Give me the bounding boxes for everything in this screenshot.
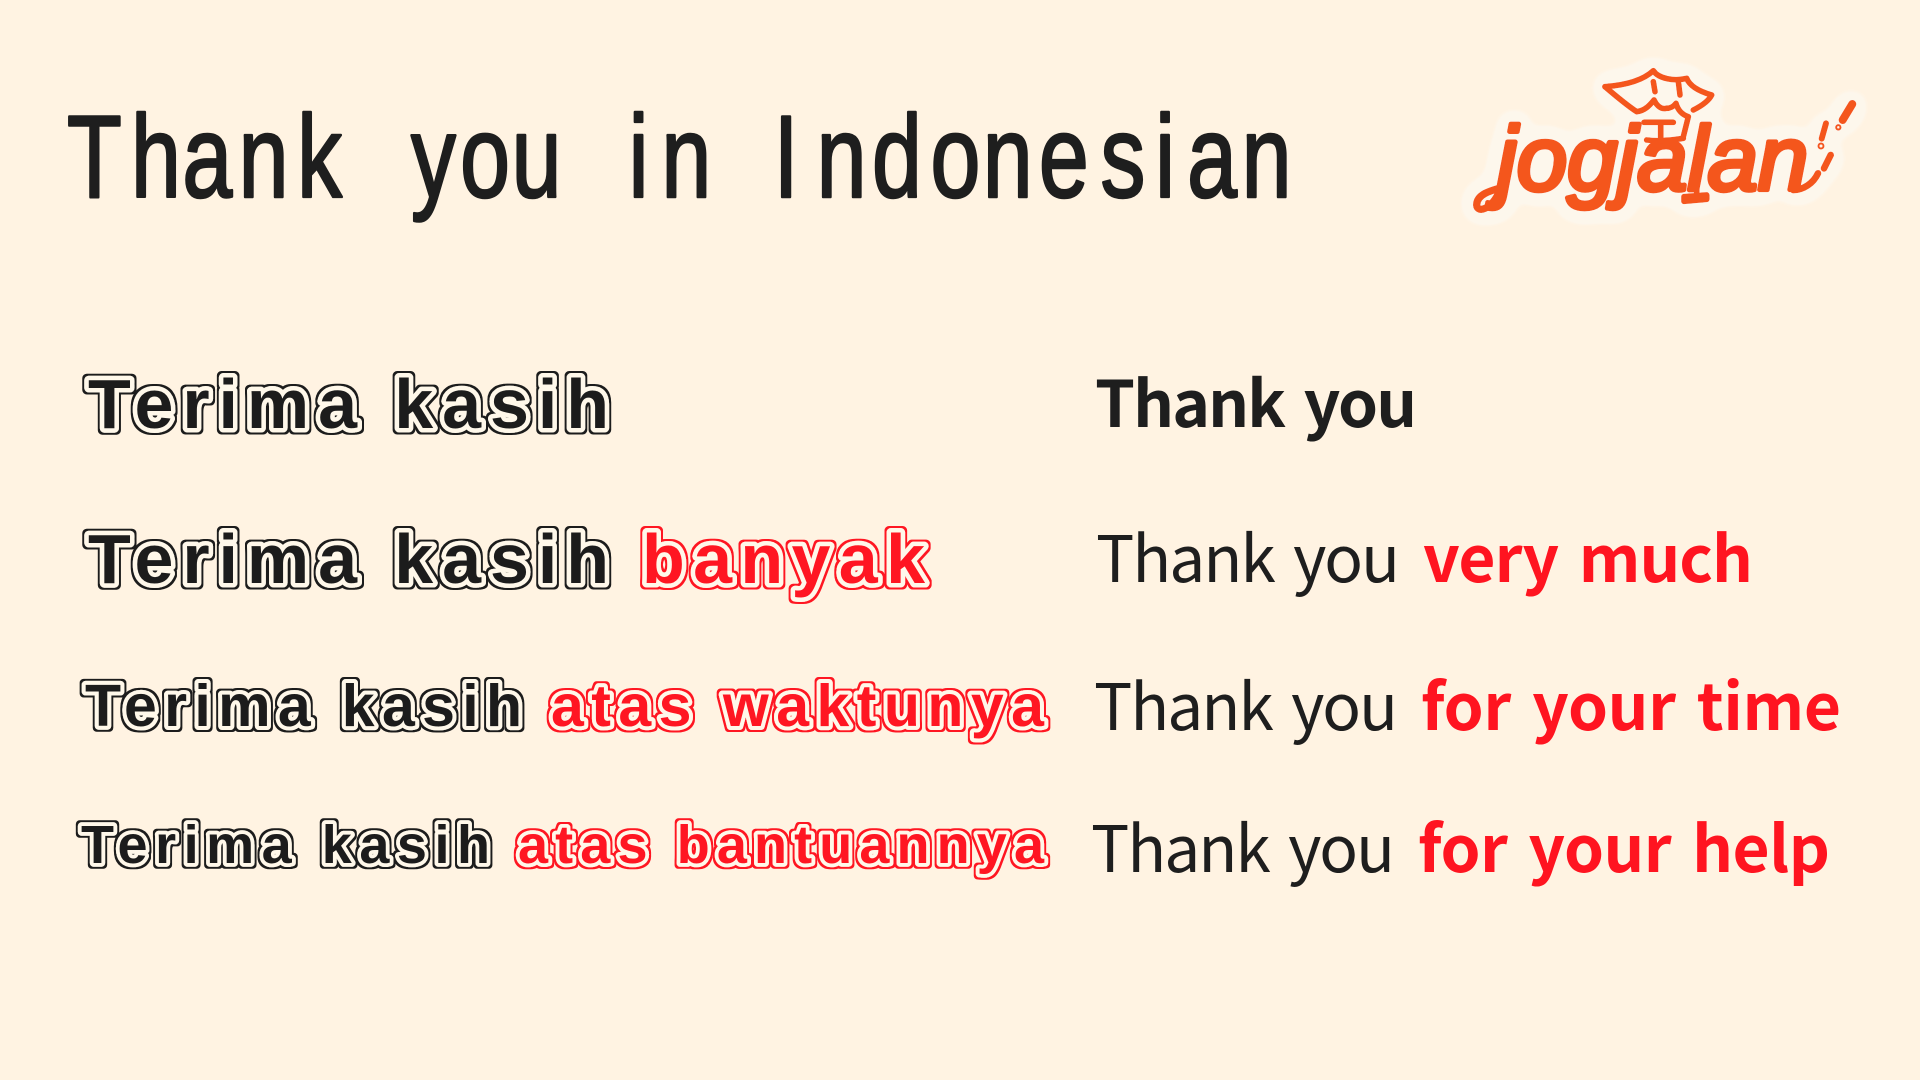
title: Thank you in Indonesian [67, 91, 1292, 223]
Indonesian emphasis: atas bantuannya [518, 815, 1045, 875]
Indonesian emphasis: atas waktunya [551, 673, 1045, 739]
logo wordmark: jogjalan [1486, 109, 1808, 210]
icon: exclamation marks [1793, 104, 1852, 190]
row 2: Terima kasih banyak [88, 509, 1753, 601]
English emphasis: for your help [1418, 799, 1830, 891]
Indonesian phrase: Terima kasih [85, 673, 522, 739]
logo: jogjalan [1477, 71, 1852, 210]
English phrase: Thank you [1091, 799, 1395, 891]
Indonesian emphasis: banyak [642, 520, 925, 598]
English emphasis: very much [1423, 509, 1753, 601]
row 1: Terima kasih [88, 354, 1417, 446]
English phrase: Thank you [1096, 509, 1400, 601]
icon: umbrella [1605, 71, 1712, 201]
Indonesian phrase: Terima kasih [88, 365, 609, 443]
Indonesian phrase: Terima kasih [88, 520, 609, 598]
English phrase: Thank you [1094, 657, 1398, 749]
English phrase: Thank you [1095, 354, 1417, 446]
row 3: Terima kasih atas waktunya [85, 657, 1841, 749]
Indonesian phrase: Terima kasih [81, 815, 490, 875]
English emphasis: for your time [1421, 657, 1841, 749]
row 4: Terima kasih atas bantuannya [81, 799, 1830, 891]
logo tail [1477, 187, 1505, 209]
